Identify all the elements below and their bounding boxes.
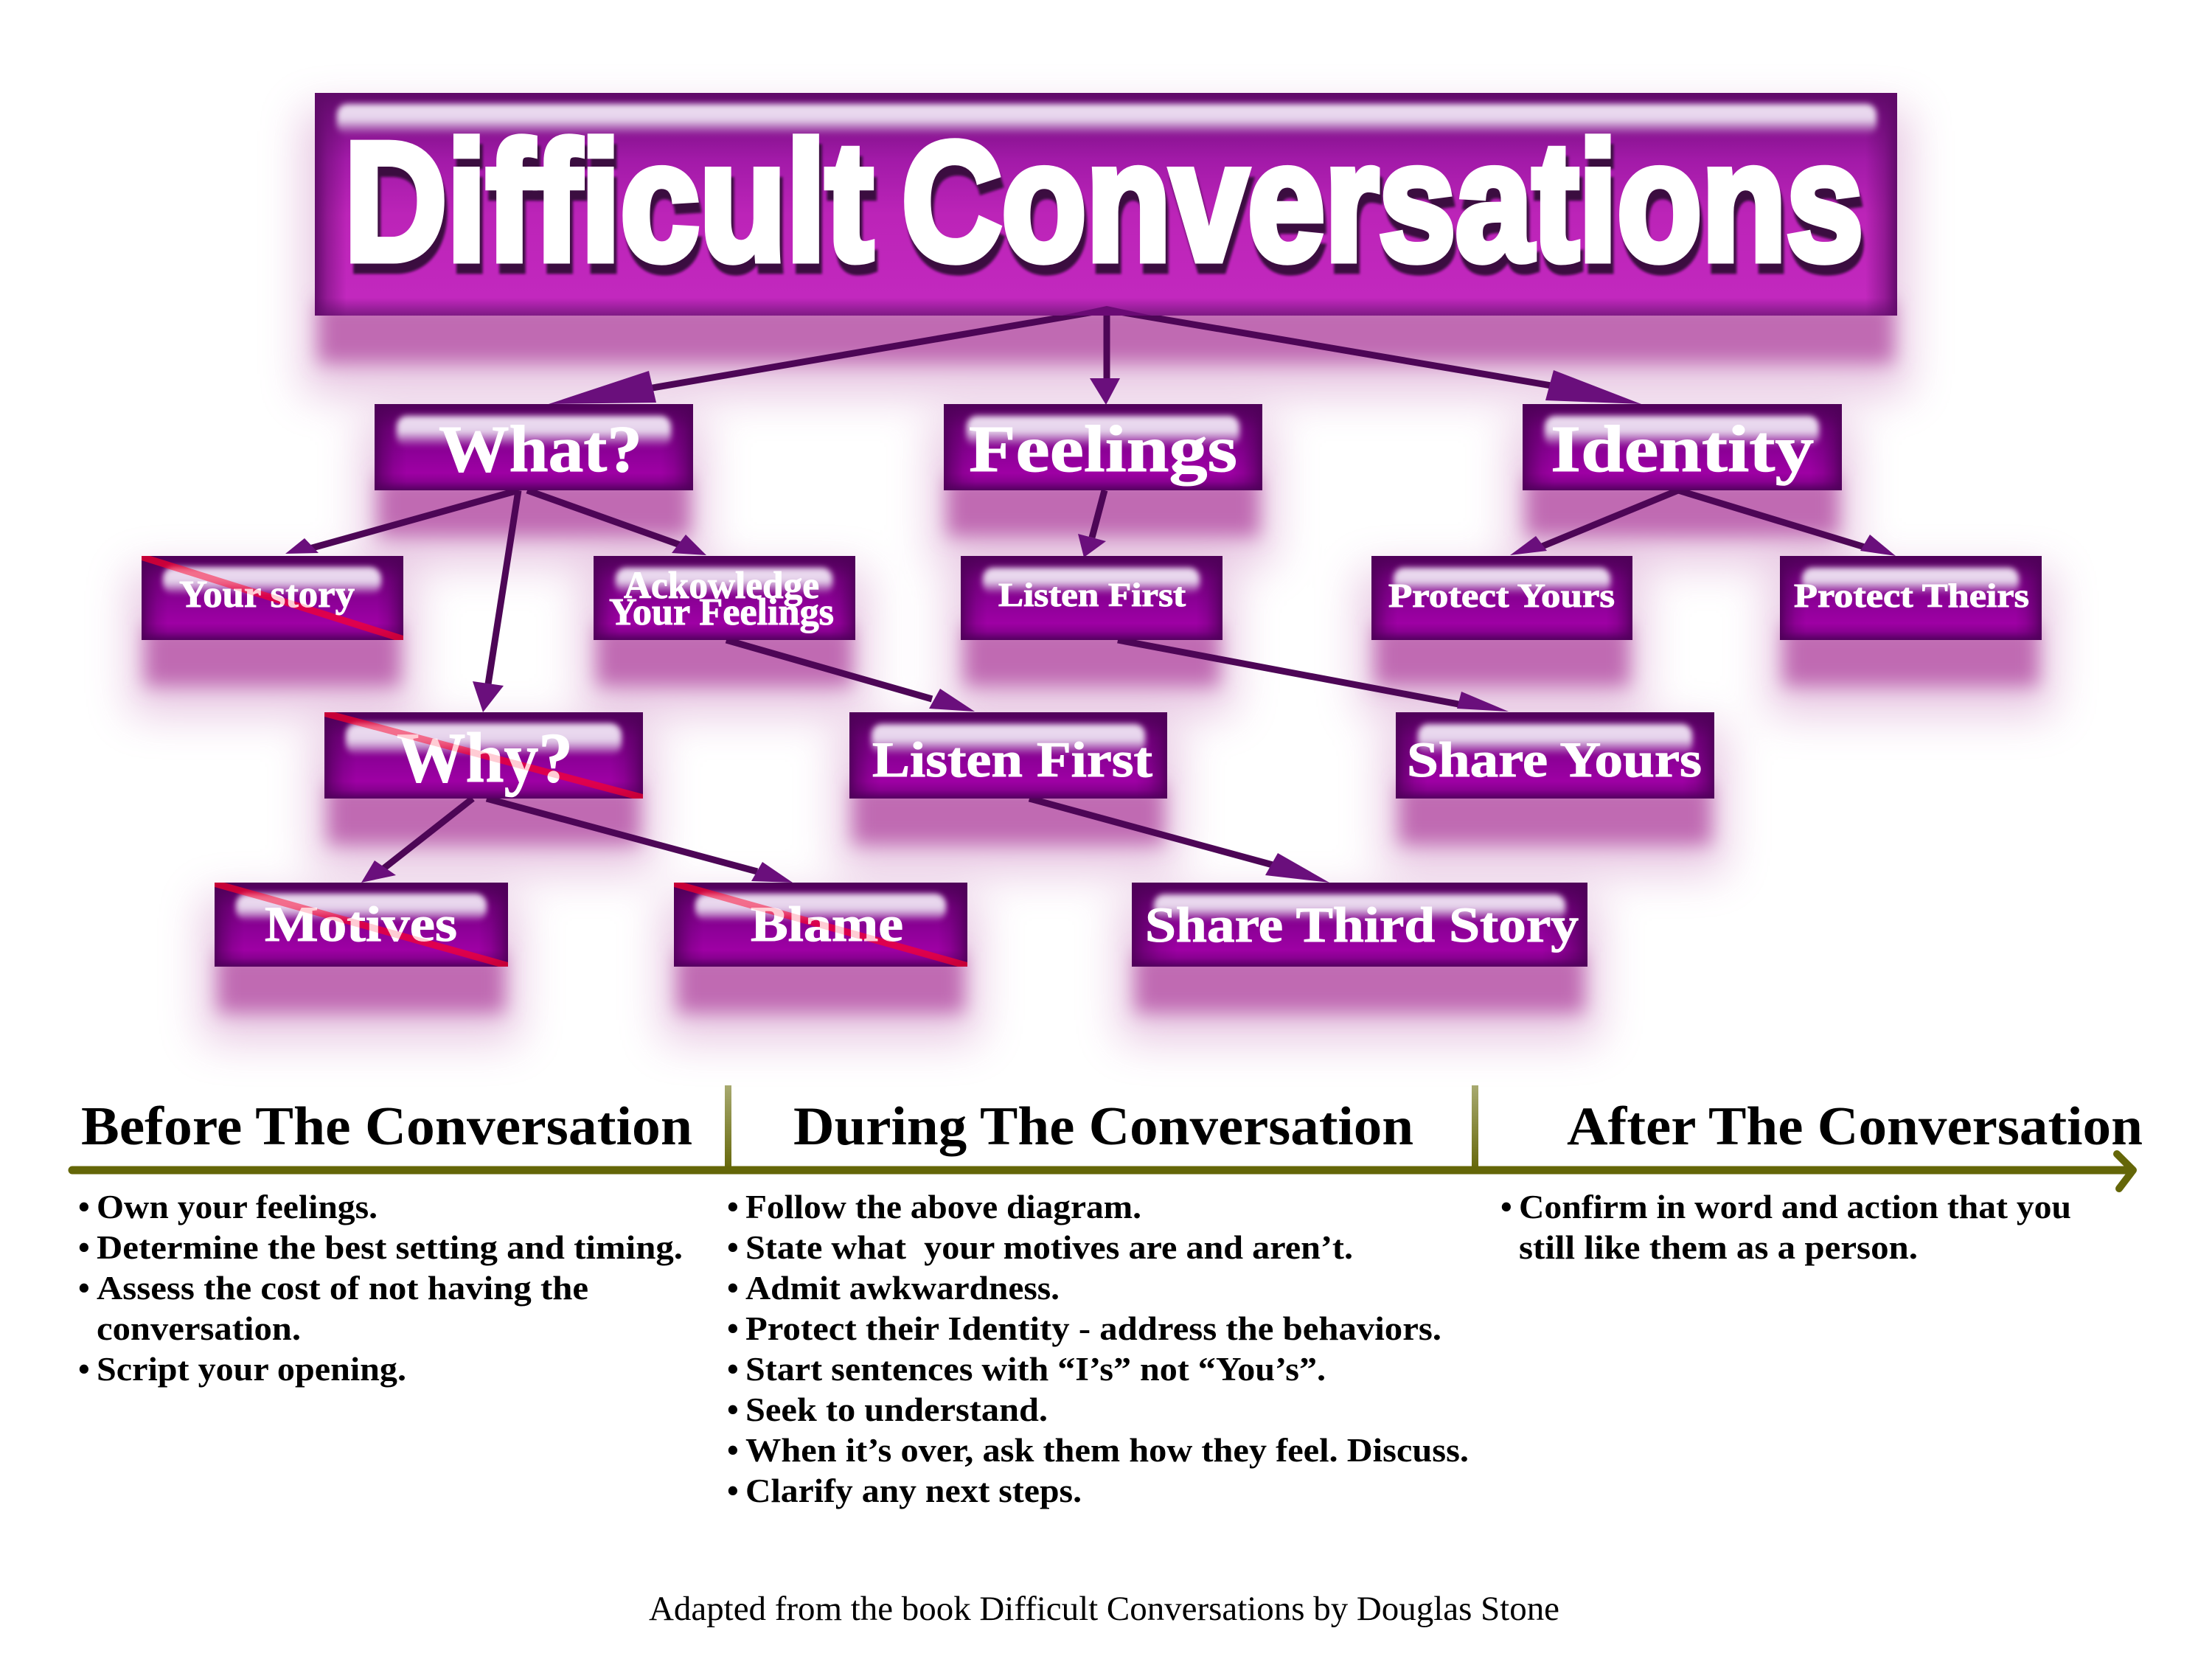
box: Identity: Identity <box>1551 413 1814 486</box>
box: Blame (struck out) <box>674 883 967 967</box>
list: during the conversation: • <box>727 1472 739 1509</box>
title text: Conversations <box>902 108 1863 296</box>
heading: after the conversation: After The Conversation <box>1567 1096 2143 1157</box>
list: after the conversation: Confirm in word and action that you <box>1519 1189 2071 1225</box>
list: before the conversation: Own your feelings. <box>97 1189 378 1225</box>
box: Listen First (small): Listen First <box>998 576 1186 613</box>
strike line <box>674 883 967 967</box>
list: during the conversation: Follow the above diagram. <box>745 1189 1141 1225</box>
box: Share Yours: Share Yours <box>1407 731 1702 787</box>
arrow: Why? to Motives <box>361 799 473 883</box>
arrow: What? to Your story <box>285 490 518 554</box>
arrow: Identity to Protect Theirs <box>1678 490 1896 556</box>
heading: during the conversation: During The Conversation <box>793 1096 1413 1157</box>
title shadow: Difficult <box>347 119 876 306</box>
box: Protect Theirs: Protect Theirs <box>1794 577 2029 614</box>
arrow: What? to Acknowledge <box>527 490 706 555</box>
box: Feelings: Feelings <box>969 413 1237 486</box>
arrow: Listen First to Share Yours <box>1118 640 1509 712</box>
box: Why? (struck out) <box>324 712 643 799</box>
list: before the conversation: conversation. <box>97 1310 301 1347</box>
arrow: Feelings to Listen First <box>1078 490 1106 557</box>
arrow: title to Identity <box>1107 310 1641 404</box>
title banner <box>315 93 1897 316</box>
list: before the conversation: Script your opening. <box>97 1351 406 1388</box>
list: before the conversation: • <box>78 1270 90 1307</box>
title text: Difficult <box>344 108 873 296</box>
list: during the conversation: • <box>727 1229 739 1266</box>
box: Share Yours <box>1396 712 1714 799</box>
box: Share Third Story: Share Third Story <box>1145 897 1579 953</box>
box: Why? (struck out): Why? <box>397 718 573 797</box>
list: before the conversation: • <box>78 1189 90 1225</box>
list: during the conversation: Protect their Identity - address the behaviors. <box>745 1310 1441 1347</box>
list: after the conversation: • <box>1500 1189 1512 1225</box>
box: Blame (struck out): Blame <box>751 896 903 952</box>
box: Protect Yours: Protect Yours <box>1388 577 1615 614</box>
box: Your story (struck out) <box>142 556 403 640</box>
timeline arrow <box>72 1085 2133 1189</box>
list: during the conversation: • <box>727 1189 739 1225</box>
box: Protect Yours <box>1371 556 1632 640</box>
strike line <box>215 883 508 967</box>
list: during the conversation: When it’s over, ask them how they feel. Discuss. <box>745 1432 1469 1469</box>
heading: before the conversation: Before The Conversation <box>81 1096 692 1157</box>
list: after the conversation <box>1500 1189 2071 1266</box>
list: during the conversation: State what your motives are and aren’t. <box>745 1229 1353 1266</box>
arrow: title to Feelings <box>1090 308 1120 405</box>
box: Your story (struck out): Your story <box>179 574 355 616</box>
arrow: Why? to Blame <box>487 799 793 883</box>
box: Protect Theirs <box>1780 556 2042 640</box>
title text <box>344 108 1863 296</box>
list: during the conversation: • <box>727 1310 739 1347</box>
strike line <box>142 556 403 640</box>
arrow: Identity to Protect Yours <box>1510 490 1678 555</box>
box drop shadows <box>131 111 2053 1040</box>
list: before the conversation: • <box>78 1351 90 1388</box>
box: Listen First (small) <box>961 556 1222 640</box>
box: Motives (struck out) <box>215 883 508 967</box>
list: during the conversation: • <box>727 1432 739 1469</box>
footer credit: Adapted from the book Difficult Conversations by Douglas Stone <box>649 1590 1559 1628</box>
list: during the conversation: Start sentences with “I’s” not “You’s”. <box>745 1351 1326 1388</box>
list: before the conversation: • <box>78 1229 90 1266</box>
box: Listen First (large) <box>849 712 1167 799</box>
list: during the conversation: Clarify any next steps. <box>745 1472 1082 1509</box>
arrow origin on title <box>1062 306 1152 316</box>
title shadow: Conversations <box>905 119 1866 306</box>
box: Identity <box>1523 404 1842 490</box>
box: Share Third Story <box>1132 883 1587 967</box>
list: during the conversation: • <box>727 1391 739 1428</box>
strike line <box>324 712 643 799</box>
list: before the conversation: Assess the cost of not having the <box>97 1270 588 1307</box>
list: before the conversation: Determine the best setting and timing. <box>97 1229 683 1266</box>
arrow: Listen First to Share Third Story <box>1029 799 1329 883</box>
box: Feelings <box>944 404 1262 490</box>
list: during the conversation: • <box>727 1270 739 1307</box>
list: during the conversation: • <box>727 1351 739 1388</box>
box: Listen First (large): Listen First <box>872 731 1152 787</box>
list: during the conversation: Admit awkwardness. <box>745 1270 1060 1307</box>
list: after the conversation: still like them as a person. <box>1519 1229 1918 1266</box>
arrow: Acknowledge to Listen First <box>726 640 975 712</box>
box: Acknowledge Your Feelings <box>594 556 855 640</box>
list: before the conversation <box>78 1189 683 1388</box>
box: What? <box>375 404 693 490</box>
connector arrows <box>285 308 1896 883</box>
arrow: What? to Why? <box>473 490 518 712</box>
box: Acknowledge Your Feelings: Ackowledge <box>624 565 819 607</box>
title shadow <box>347 119 1866 306</box>
list: during the conversation <box>727 1189 1469 1509</box>
box: Acknowledge Your Feelings: Your Feelings <box>609 591 834 633</box>
box: What?: What? <box>439 413 642 486</box>
arrow: title to What? <box>549 310 1107 404</box>
list: during the conversation: Seek to understand. <box>745 1391 1048 1428</box>
box: Motives (struck out): Motives <box>265 896 457 952</box>
